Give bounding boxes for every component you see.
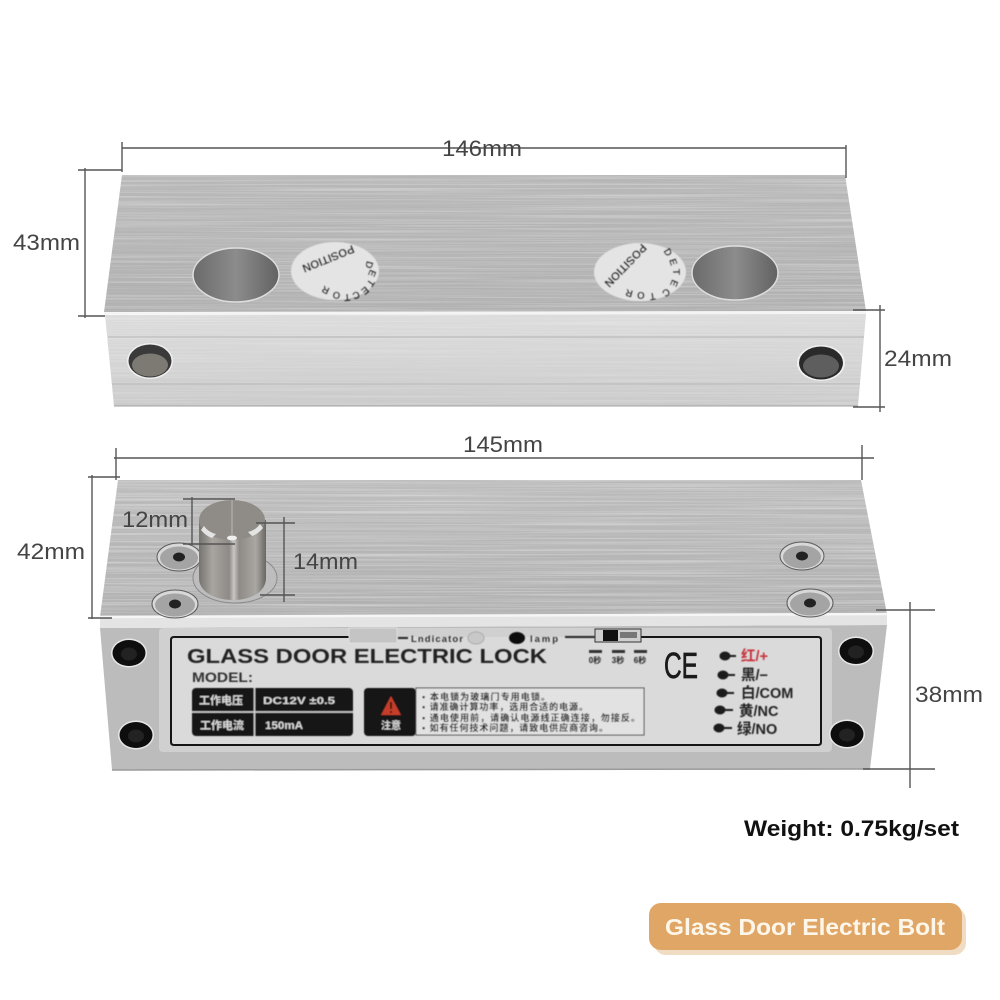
left detector position sticker: T	[364, 277, 376, 288]
right detector position sticker: R	[624, 286, 634, 299]
spec table	[192, 688, 353, 736]
front face of lower body	[100, 614, 887, 770]
dimension: 145mm width	[114, 432, 874, 480]
left detector position sticker: POSITION	[300, 242, 356, 274]
right detector position sticker: E	[667, 278, 680, 288]
dimension: 24mm depth	[853, 305, 952, 412]
left detector position sticker: O	[332, 288, 341, 301]
front face of upper body	[100, 312, 870, 408]
badge: product name: Glass Door Electric Bolt	[665, 914, 945, 940]
right detector position sticker: O	[637, 289, 645, 300]
dimension: 145mm width: 145mm	[463, 432, 543, 457]
dimension: 42mm height	[17, 475, 120, 619]
top screws	[152, 542, 833, 618]
spec table: 工作电流	[200, 718, 244, 732]
top face of lower body	[98, 478, 890, 618]
warning notes: ▪ 本电锁为玻璃门专用电锁。	[422, 691, 550, 702]
delay markings: 3秒	[612, 655, 624, 665]
dimension: 38mm depth: 38mm	[915, 682, 983, 707]
delay markings: 6秒	[634, 655, 646, 665]
dimension: 146mm width	[122, 136, 846, 178]
warning notes	[416, 688, 644, 735]
delay switch	[595, 629, 641, 642]
left detector position sticker: T	[344, 291, 351, 302]
wire legend	[714, 647, 793, 738]
right detector position sticker	[594, 241, 686, 301]
right detector position sticker: E	[666, 257, 679, 267]
indicator row: lamp	[530, 634, 558, 645]
weight note: Weight: 0.75kg/set	[744, 816, 960, 841]
left front screw hole	[127, 343, 173, 379]
warning notes: ▪ 通电使用前，请确认电源线正确连接，勿接反。	[422, 712, 640, 723]
dimension: 146mm width: 146mm	[442, 136, 522, 161]
indicator row: Lndicator	[411, 634, 463, 645]
badge: product name	[649, 903, 966, 955]
spec table: 工作电压	[199, 693, 243, 707]
dimension: 42mm height: 42mm	[17, 539, 85, 564]
model label: MODEL:	[192, 669, 253, 685]
dimension: 12mm pin: 12mm	[122, 507, 188, 532]
left detector position sticker: E	[358, 284, 371, 296]
plate notch	[349, 628, 397, 643]
dimension: 14mm pin: 14mm	[293, 549, 358, 574]
right mounting hole, top face	[692, 246, 778, 300]
label plate	[159, 628, 832, 752]
front mounting holes	[111, 636, 874, 750]
panel: upper lock body	[100, 170, 870, 408]
right detector position sticker: POSITION	[602, 241, 648, 289]
warning box: 注意	[381, 719, 401, 732]
left detector position sticker: E	[365, 268, 378, 278]
wire legend: 黄/NC	[739, 702, 779, 720]
panel: lower lock body	[98, 478, 890, 770]
dimension: 43mm height	[13, 168, 122, 318]
bolt pin	[193, 500, 277, 603]
wire legend: 绿/NO	[737, 721, 777, 738]
right detector position sticker: T	[648, 290, 656, 301]
delay markings	[589, 650, 647, 665]
spec table: DC12V ±0.5	[263, 695, 335, 707]
warning box	[364, 688, 416, 736]
left detector position sticker: C	[351, 288, 361, 301]
left mounting hole, top face	[193, 248, 279, 302]
plate heading: GLASS DOOR ELECTRIC LOCK	[187, 646, 548, 668]
CE mark: CE	[664, 645, 698, 686]
right detector position sticker: D	[661, 247, 674, 259]
dimension: 43mm height: 43mm	[13, 230, 80, 255]
wire legend: 黑/−	[741, 667, 768, 684]
wire legend: 红/+	[741, 647, 768, 665]
delay markings: 0秒	[589, 655, 601, 665]
wire legend: 白/COM	[741, 684, 793, 702]
right detector position sticker: T	[670, 269, 681, 275]
dimension: 24mm depth: 24mm	[884, 346, 952, 371]
dimension: 12mm pin	[122, 497, 235, 545]
dimension: 38mm depth	[863, 602, 983, 788]
right front screw hole	[797, 345, 845, 381]
warning notes: ▪ 请准确计算功率，选用合适的电源。	[422, 701, 588, 712]
top face of upper body	[100, 170, 870, 315]
dimension: 14mm pin	[256, 517, 358, 602]
left detector position sticker: D	[362, 260, 375, 270]
right detector position sticker: C	[659, 285, 672, 298]
spec table: 150mA	[265, 720, 303, 732]
left detector position sticker: R	[320, 282, 332, 296]
warning notes: ▪ 如有任何技术问题，请致电供应商咨询。	[422, 722, 608, 733]
indicator row	[398, 632, 595, 645]
left detector position sticker	[291, 242, 379, 302]
